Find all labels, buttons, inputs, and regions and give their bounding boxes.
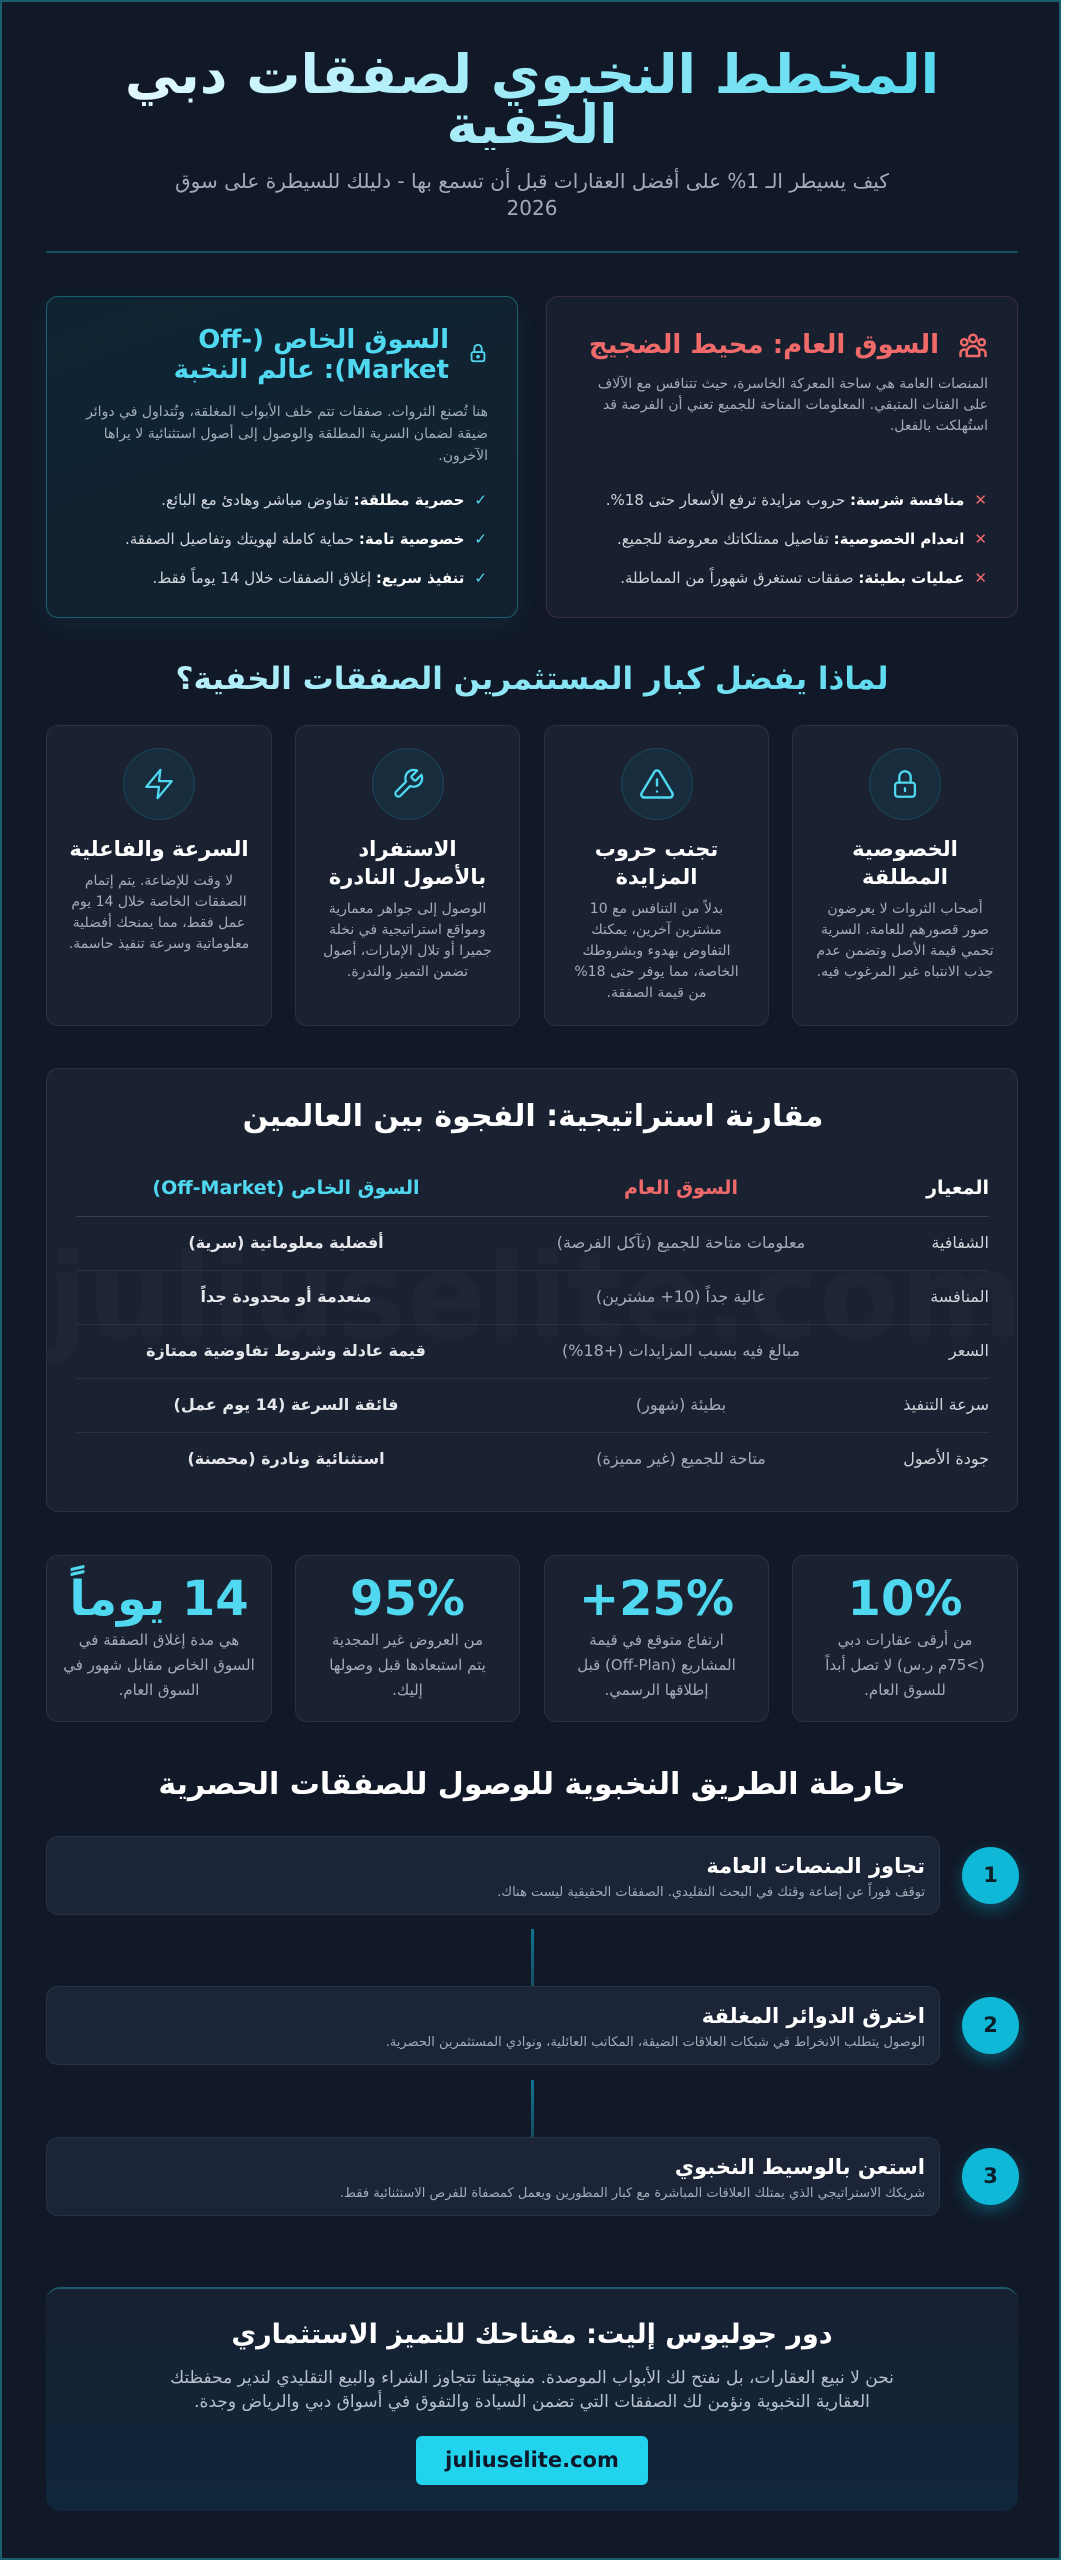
card: speed bbox=[46, 725, 272, 1026]
step 1: تجاوز المنصات العامة bbox=[706, 1854, 925, 1878]
table: فائقة السرعة (14 يوم عمل) bbox=[174, 1395, 398, 1414]
heading: why investors prefer: لماذا يفضل كبار المستثمرين الصفقات الخفية؟ bbox=[176, 661, 888, 697]
icon: warning bbox=[620, 748, 692, 820]
stat: 25%+: ارتفاع متوقع في قيمة المشاريع (Off-Plan) قبل إطلاقها الرسمي. bbox=[577, 1631, 736, 1699]
icon: number 3: 3 bbox=[983, 2164, 998, 2188]
stat: 95%: إليك. bbox=[392, 1681, 423, 1699]
stat: 10%: للسوق العام. bbox=[864, 1681, 946, 1699]
table: المعيار bbox=[926, 1177, 989, 1199]
card: privacy: أصحاب الثروات لا يعرضون bbox=[827, 901, 983, 917]
card: privacy: الخصوصية bbox=[852, 837, 958, 861]
list: private benefits: ✓تنفيذ سريع: إغلاق الصفقات خلال 14 يوماً فقط. bbox=[153, 569, 487, 587]
list: private benefits bbox=[125, 491, 487, 587]
list: public drawbacks bbox=[606, 490, 987, 587]
card: rare assets bbox=[295, 725, 520, 1026]
table: المنافسة bbox=[930, 1287, 989, 1306]
table: سرعة التنفيذ bbox=[903, 1395, 989, 1414]
step 3 bbox=[46, 2137, 1026, 2218]
card: avoid bidding wars: بدلاً من التنافس مع 10 مشترين آخرين، يمكنك التفاوض بهدوء وبشروطك الخاصة، مما يوفر حتى 18% من قيمة الصفقة. bbox=[574, 901, 739, 1001]
table: السوق الخاص (Off-Market) bbox=[152, 1177, 420, 1199]
arrow: connector 2 bbox=[531, 2080, 534, 2137]
card: rare assets: الوصول إلى جواهر معمارية ومواقع استراتيجية في نخلة جميرا أو تلال الإمارات، أصول تضمن التميز والندرة. bbox=[323, 901, 492, 980]
step 1 bbox=[46, 1836, 1026, 1918]
list: private benefits: ✓خصوصية تامة: حماية كاملة لهويتك وتفاصيل الصفقة. bbox=[125, 530, 487, 548]
panel: private market bbox=[46, 296, 518, 618]
heading: private market: السوق الخاص (Off-Market): عالم النخبة bbox=[174, 325, 449, 385]
step 1: توقف فوراً عن إضاعة وقتك في البحث التقليدي. الصفقات الحقيقية ليست هناك. bbox=[497, 1885, 925, 1900]
table: استثنائية ونادرة (محصنة) bbox=[187, 1449, 385, 1468]
icon: number 2: 2 bbox=[983, 2013, 998, 2037]
table: متاحة للجميع (غير مميزة) bbox=[596, 1449, 766, 1468]
stat: 25%+: +25% bbox=[579, 1571, 734, 1627]
arrow: connector 1 bbox=[531, 1929, 534, 1986]
panel: footer call to action bbox=[46, 2287, 1018, 2511]
text: footer paragraph: نحن لا نبيع العقارات، بل نفتح لك الأبواب الموصدة. منهجيتنا تتجاوز الشراء والبيع التقليدي لندير محفظتك العقارية النخبوية ونؤمن لك الصفقات التي تضمن السيادة والتفوق في أسواق دبي والرياض وجدة. bbox=[170, 2368, 894, 2412]
stat: 10%: من أرقى عقارات دبي bbox=[838, 1631, 972, 1649]
card: avoid bidding wars bbox=[544, 725, 769, 1026]
stat: 14 days: 14 يوماً bbox=[69, 1571, 249, 1627]
stat: 95%: من العروض غير المجدية bbox=[332, 1631, 483, 1649]
list: public drawbacks: ✕منافسة شرسة: حروب مزايدة ترفع الأسعار حتى 18%. bbox=[606, 491, 987, 509]
card: privacy: جذب الانتباه غير المرغوب فيه. bbox=[817, 964, 993, 980]
table: جودة الأصول bbox=[903, 1449, 989, 1468]
step 3: استعن بالوسيط النخبوي bbox=[675, 2155, 925, 2179]
icon: number 3 bbox=[962, 2148, 1019, 2205]
heading: roadmap: خارطة الطريق النخبوية للوصول للصفقات الحصرية bbox=[158, 1767, 906, 1802]
table: أفضلية معلوماتية (سرية) bbox=[188, 1233, 384, 1252]
subtitle: كيف يسيطر الـ 1% على أفضل العقارات قبل أن تسمع بها - دليلك للسيطرة على سوق 2026 bbox=[175, 169, 889, 220]
card: rare assets: الاستفراد بالأصول النادرة bbox=[329, 837, 486, 889]
stat: 25%+ bbox=[544, 1555, 769, 1722]
table bbox=[76, 1177, 989, 1468]
table: بطيئة (شهور) bbox=[636, 1395, 726, 1414]
table: السعر bbox=[949, 1341, 989, 1360]
stat: 95% bbox=[295, 1555, 520, 1722]
stat: 10%: 10% bbox=[848, 1571, 962, 1627]
icon: users bbox=[959, 334, 987, 358]
text: private description: هنا تُصنع الثروات. صفقات تتم خلف الأبواب المغلقة، وتُتداول في دوائر ضيقة لضمان السرية المطلقة والوصول إلى أصول استثنائية لا يراها الآخرون. bbox=[86, 404, 488, 464]
watermark: juliuselite.com bbox=[47, 1227, 1018, 1365]
icon: number 1 bbox=[962, 1847, 1019, 1904]
icon: number 2 bbox=[962, 1997, 1019, 2054]
panel: comparison table bbox=[46, 1068, 1018, 1512]
table: قيمة عادلة وشروط تفاوضية ممتازة bbox=[146, 1341, 426, 1360]
table: عالية جداً (10+ مشترين) bbox=[596, 1287, 766, 1306]
icon: lock bbox=[869, 748, 941, 820]
stat: 14 days: هي مدة إغلاق الصفقة في السوق الخاص مقابل شهور في السوق العام. bbox=[63, 1631, 255, 1699]
table: السوق العام bbox=[624, 1177, 738, 1199]
stat: 10%: (>75م ر.س) لا تصل أبداً bbox=[825, 1656, 985, 1674]
icon: number 1: 1 bbox=[983, 1863, 998, 1887]
title: المخطط النخبوي لصفقات دبي الخفية bbox=[125, 43, 939, 156]
card: privacy: صور قصورهم للعامة. السرية bbox=[821, 922, 989, 938]
table: منعدمة أو محدودة جداً bbox=[200, 1287, 372, 1306]
card: avoid bidding wars: تجنب حروب المزايدة bbox=[595, 837, 718, 889]
icon: lightning bbox=[123, 748, 195, 820]
button: website: juliuselite.com bbox=[445, 2448, 619, 2472]
stat: 10% bbox=[792, 1555, 1018, 1722]
text: public description: المنصات العامة هي ساحة المعركة الخاسرة، حيث تتنافس مع الآلاف على الفتات المتبقي. المعلومات المتاحة للجميع تعني أن الفرصة قد استُهلكت بالفعل. bbox=[598, 376, 988, 434]
table: معلومات متاحة للجميع (تآكل الفرصة) bbox=[557, 1233, 805, 1252]
icon: lock bbox=[470, 344, 486, 362]
step 2: اخترق الدوائر المغلقة bbox=[702, 2004, 925, 2028]
list: public drawbacks: ✕انعدام الخصوصية: تفاصيل ممتلكاتك معروضة للجميع. bbox=[617, 530, 987, 548]
icon: wrench bbox=[372, 748, 444, 820]
card: speed: السرعة والفاعلية bbox=[69, 837, 249, 861]
heading: why investors prefer bbox=[46, 659, 1018, 699]
list: public drawbacks: ✕عمليات بطيئة: صفقات تستغرق شهوراً من المماطلة. bbox=[620, 569, 987, 587]
button: website bbox=[416, 2436, 648, 2485]
stat: 95%: يتم استبعادها قبل وصولها bbox=[329, 1656, 486, 1674]
stat: 14 days bbox=[46, 1555, 272, 1722]
heading: footer: دور جوليوس إليت: مفتاحك للتميز الاستثماري bbox=[231, 2319, 833, 2350]
panel: public market bbox=[546, 296, 1018, 618]
card: speed: لا وقت للإضاعة. يتم إتمام الصفقات الخاصة خلال 14 يوم عمل فقط، مما يمنحك أفضلية معلوماتية وسرعة تنفيذ حاسمة. bbox=[69, 873, 249, 952]
table: الشفافية bbox=[931, 1233, 989, 1252]
heading: public market: السوق العام: محيط الضجيج bbox=[589, 330, 939, 360]
table: مبالغ فيه بسبب المزايدات (+18%) bbox=[562, 1341, 800, 1360]
list: private benefits: ✓حصرية مطلقة: تفاوض مباشر وهادئ مع البائع. bbox=[161, 491, 487, 509]
stat: 95%: 95% bbox=[350, 1571, 465, 1627]
card: privacy: تحمي قيمة الأصل وتضمن عدم bbox=[816, 943, 994, 959]
step 2: الوصول يتطلب الانخراط في شبكات العلاقات الضيقة، المكاتب العائلية، ونوادي المستثمرين الحصرية. bbox=[386, 2035, 925, 2050]
step 2 bbox=[46, 1986, 1026, 2068]
card: privacy bbox=[792, 725, 1018, 1026]
card: privacy: المطلقة bbox=[862, 865, 948, 889]
heading: comparison: مقارنة استراتيجية: الفجوة بين العالمين bbox=[243, 1099, 823, 1134]
step 3: شريكك الاستراتيجي الذي يمتلك العلاقات المباشرة مع كبار المطورين ويعمل كمصفاة للفرص الاستثنائية فقط. bbox=[340, 2186, 925, 2201]
